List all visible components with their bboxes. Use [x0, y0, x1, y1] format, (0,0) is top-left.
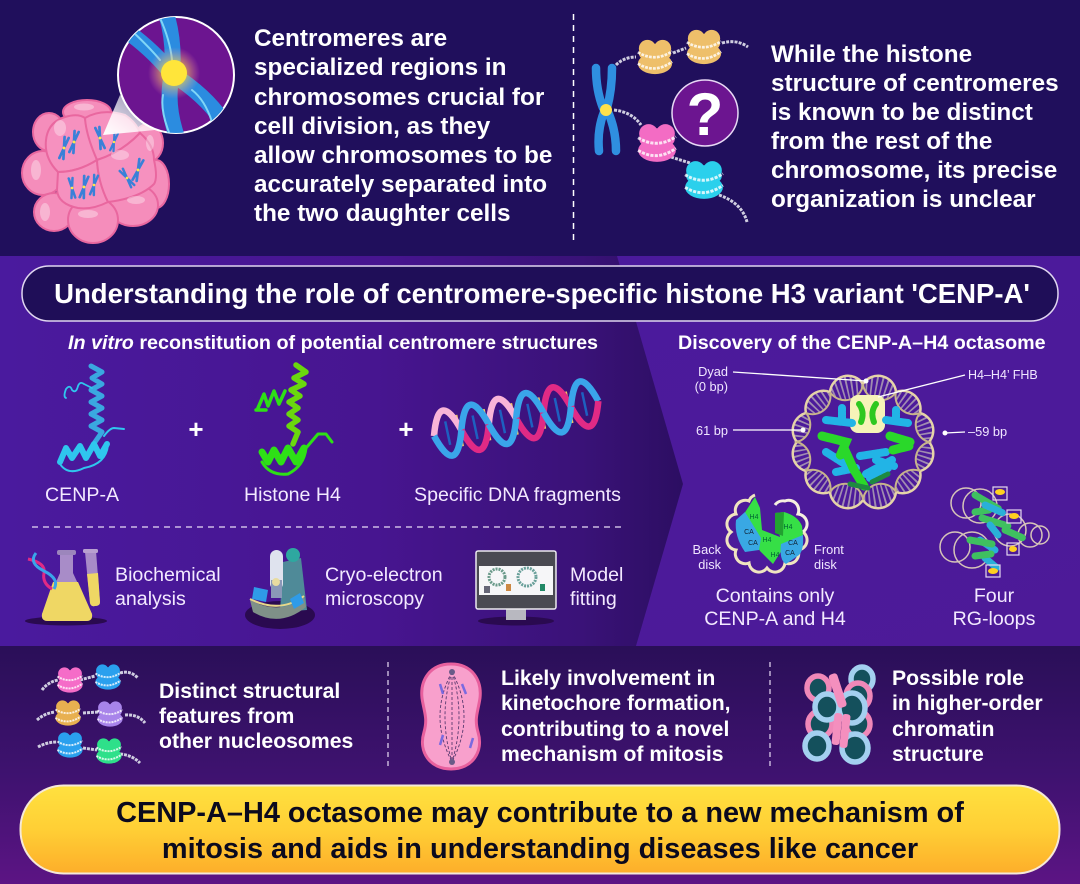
- text block: histone structure: [771, 41, 1059, 213]
- icon: distinct nucleosome pairs: [37, 664, 145, 764]
- text block: histone structure: is known to be distinct: [771, 99, 1033, 126]
- panel: top background: [0, 0, 1080, 256]
- text block: higher-order chromatin: [892, 667, 1043, 766]
- icon: dividing cell in mitosis: [422, 664, 480, 769]
- label: Biochemical analysis: [115, 564, 221, 610]
- callout: structure labels: Dyad: [698, 364, 728, 379]
- text block: higher-order chromatin: Possible role: [892, 667, 1024, 690]
- callout: structure labels: [695, 364, 1038, 439]
- icon: question mark: [672, 80, 738, 148]
- illustration: CENP-A–H4 octasome structure: [793, 376, 933, 508]
- icon: disk diagram of CENP-A and H4: Front: [814, 542, 844, 557]
- icon: plus: +: [188, 414, 204, 444]
- icon: disk diagram of CENP-A and H4: H4: [784, 524, 793, 531]
- label: four RG-loops: RG-loops: [953, 608, 1036, 630]
- callout: conclusion pill: CENP-A–H4 octasome may contribute to a new mechanism of: [116, 797, 964, 829]
- text block: kinetochore formation: kinetochore formation,: [501, 692, 731, 715]
- callout: structure labels: 61 bp: [696, 423, 728, 438]
- label: four RG-loops: Four: [974, 585, 1015, 607]
- icon: disk diagram of CENP-A and H4: H4: [771, 552, 780, 559]
- text block: kinetochore formation: contributing to a novel: [501, 718, 729, 741]
- icon: CENP-A ribbon structure: [60, 366, 124, 471]
- label: cryo-electron microscopy: Cryo-electron: [325, 564, 443, 586]
- heading: title pill: Understanding the role of centromere-specific histone H3 variant 'CENP-A': [54, 278, 1030, 309]
- text block: histone structure: structure of centromeres: [771, 70, 1059, 97]
- text block: centromeres intro: Centromeres are: [254, 25, 447, 52]
- label: contains only CENP-A and H4: [704, 585, 846, 630]
- label: Specific DNA fragments: Specific DNA fragments: [414, 484, 621, 506]
- text block: centromeres intro: [254, 25, 552, 227]
- text block: centromeres intro: accurately separated into: [254, 171, 547, 198]
- illustration: chromosome with nucleosomes: [596, 30, 748, 222]
- icon: disk diagram of CENP-A and H4: H4: [763, 537, 772, 544]
- text block: centromeres intro: the two daughter cells: [254, 200, 511, 227]
- icon: plus: +: [398, 414, 414, 444]
- callout: structure labels: –59 bp: [968, 424, 1007, 439]
- icon: question mark: ?: [687, 81, 723, 148]
- icon: disk diagram of CENP-A and H4: CA: [744, 529, 754, 536]
- icon: disk diagram of CENP-A and H4: H4: [750, 514, 759, 521]
- panel: bottom background: [0, 646, 1080, 884]
- label: Biochemical analysis: analysis: [115, 588, 186, 610]
- text block: distinct structural features: other nucleosomes: [159, 730, 353, 753]
- heading: in vitro reconstitution: In vitro reconstitution of potential centromere structures: [68, 332, 598, 354]
- icon: histone H4 ribbon structure: [256, 365, 332, 474]
- label: contains only CENP-A and H4: Contains only: [716, 585, 835, 607]
- text block: higher-order chromatin: in higher-order: [892, 692, 1043, 715]
- callout: structure labels: H4–H4’ FHB: [968, 368, 1038, 382]
- callout: conclusion pill: mitosis and aids in understanding diseases like cancer: [162, 833, 918, 865]
- text block: histone structure: organization is unclear: [771, 186, 1036, 213]
- text block: higher-order chromatin: structure: [892, 743, 984, 766]
- text block: kinetochore formation: mechanism of mitosis: [501, 743, 724, 766]
- label: model fitting: fitting: [570, 588, 617, 610]
- icon: disk diagram of CENP-A and H4: CA: [785, 550, 795, 557]
- label: model fitting: [570, 564, 623, 610]
- text block: histone structure: chromosome, its precise: [771, 157, 1057, 184]
- callout: conclusion pill: [20, 786, 1060, 874]
- text block: centromeres intro: cell division, as they: [254, 113, 491, 140]
- text block: kinetochore formation: [501, 667, 731, 766]
- icon: four RG-loops structure: [940, 487, 1049, 577]
- text block: histone structure: While the histone: [771, 41, 972, 68]
- label: CENP-A: CENP-A: [45, 484, 120, 506]
- label: Histone H4: Histone H4: [244, 484, 341, 506]
- text block: higher-order chromatin: chromatin: [892, 718, 994, 741]
- illustration: cell cluster with magnified centromere: [22, 10, 234, 243]
- heading: title pill: [22, 266, 1058, 321]
- text block: centromeres intro: allow chromosomes to be: [254, 142, 552, 169]
- text block: distinct structural features: [159, 680, 353, 753]
- icon: flask and test tube: [25, 549, 107, 626]
- icon: disk diagram of CENP-A and H4: [693, 495, 844, 572]
- text block: histone structure: from the rest of the: [771, 128, 992, 155]
- icon: model fitting monitor: [476, 551, 556, 626]
- icon: disk diagram of CENP-A and H4: disk: [698, 557, 722, 572]
- panel: middle background: [0, 256, 1080, 646]
- label: cryo-electron microscopy: [325, 564, 443, 610]
- label: Biochemical analysis: Biochemical: [115, 564, 221, 586]
- label: model fitting: Model: [570, 564, 623, 586]
- text block: centromeres intro: specialized regions in: [254, 54, 506, 81]
- panel: left chevron background: [0, 256, 683, 646]
- label: four RG-loops: [953, 585, 1036, 630]
- heading: discovery of the octasome: Discovery of the CENP-A–H4 octasome: [678, 332, 1046, 354]
- icon: higher-order chromatin: [805, 667, 873, 762]
- icon: DNA double helix: [429, 379, 603, 458]
- text block: distinct structural features: features from: [159, 705, 294, 728]
- callout: structure labels: (0 bp): [695, 379, 728, 394]
- text block: centromeres intro: chromosomes crucial for: [254, 84, 545, 111]
- icon: cryo-electron microscope: [245, 548, 315, 629]
- icon: disk diagram of CENP-A and H4: CA: [748, 540, 758, 547]
- label: contains only CENP-A and H4: CENP-A and H4: [704, 608, 846, 630]
- icon: disk diagram of CENP-A and H4: CA: [788, 540, 798, 547]
- icon: disk diagram of CENP-A and H4: disk: [814, 557, 837, 572]
- text block: distinct structural features: Distinct structural: [159, 680, 340, 703]
- label: cryo-electron microscopy: microscopy: [325, 588, 424, 610]
- text block: kinetochore formation: Likely involvement in: [501, 667, 715, 690]
- icon: disk diagram of CENP-A and H4: Back: [693, 542, 722, 557]
